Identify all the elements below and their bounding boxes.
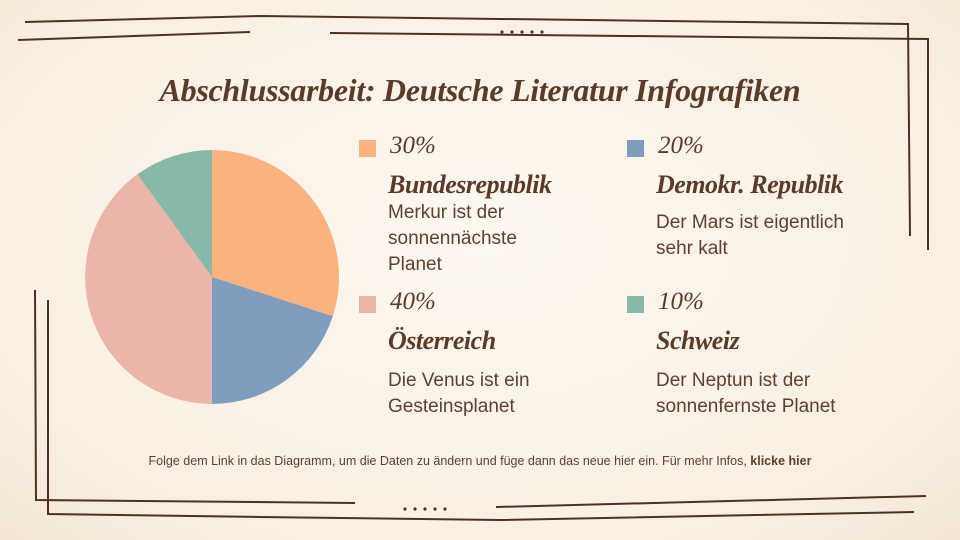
- legend: Österreich: Österreich: [388, 326, 496, 355]
- legend: Demokr. Republik: [627, 132, 844, 259]
- legend: Österreich: Gesteinsplanet: [388, 396, 515, 417]
- legend: Bundesrepublik: Planet: [388, 254, 442, 275]
- legend: Schweiz: [627, 288, 836, 417]
- legend: Demokr. Republik: sehr kalt: [656, 238, 728, 259]
- legend: Demokr. Republik: Demokr. Republik: [656, 170, 843, 199]
- legend: Schweiz: sonnenfernste Planet: [656, 396, 836, 417]
- legend: Österreich: 40%: [390, 288, 436, 315]
- legend: Schweiz: Der Neptun ist der: [656, 370, 810, 391]
- legend: Bundesrepublik: sonnennächste: [388, 228, 517, 249]
- title: Abschlussarbeit: Deutsche Literatur Infografiken: [160, 72, 800, 108]
- legend: Bundesrepublik: Bundesrepublik: [388, 170, 552, 199]
- legend: Demokr. Republik: 20%: [658, 132, 704, 159]
- pie chart: [85, 150, 339, 404]
- legend: Bundesrepublik: [359, 132, 552, 275]
- legend: Österreich: Die Venus ist ein: [388, 370, 530, 391]
- legend: Demokr. Republik: Der Mars ist eigentlich: [656, 212, 844, 233]
- legend: Bundesrepublik: 30%: [390, 132, 436, 159]
- legend: Bundesrepublik: Merkur ist der: [388, 202, 504, 223]
- legend: Österreich: [359, 288, 530, 417]
- legend: Schweiz: 10%: [658, 288, 704, 315]
- footer note: Folge dem Link in das Diagramm, um die Daten zu ändern und füge dann das neue hier ein. Für mehr Infos, klicke hier: [149, 454, 811, 468]
- legend: Schweiz: Schweiz: [656, 326, 739, 355]
